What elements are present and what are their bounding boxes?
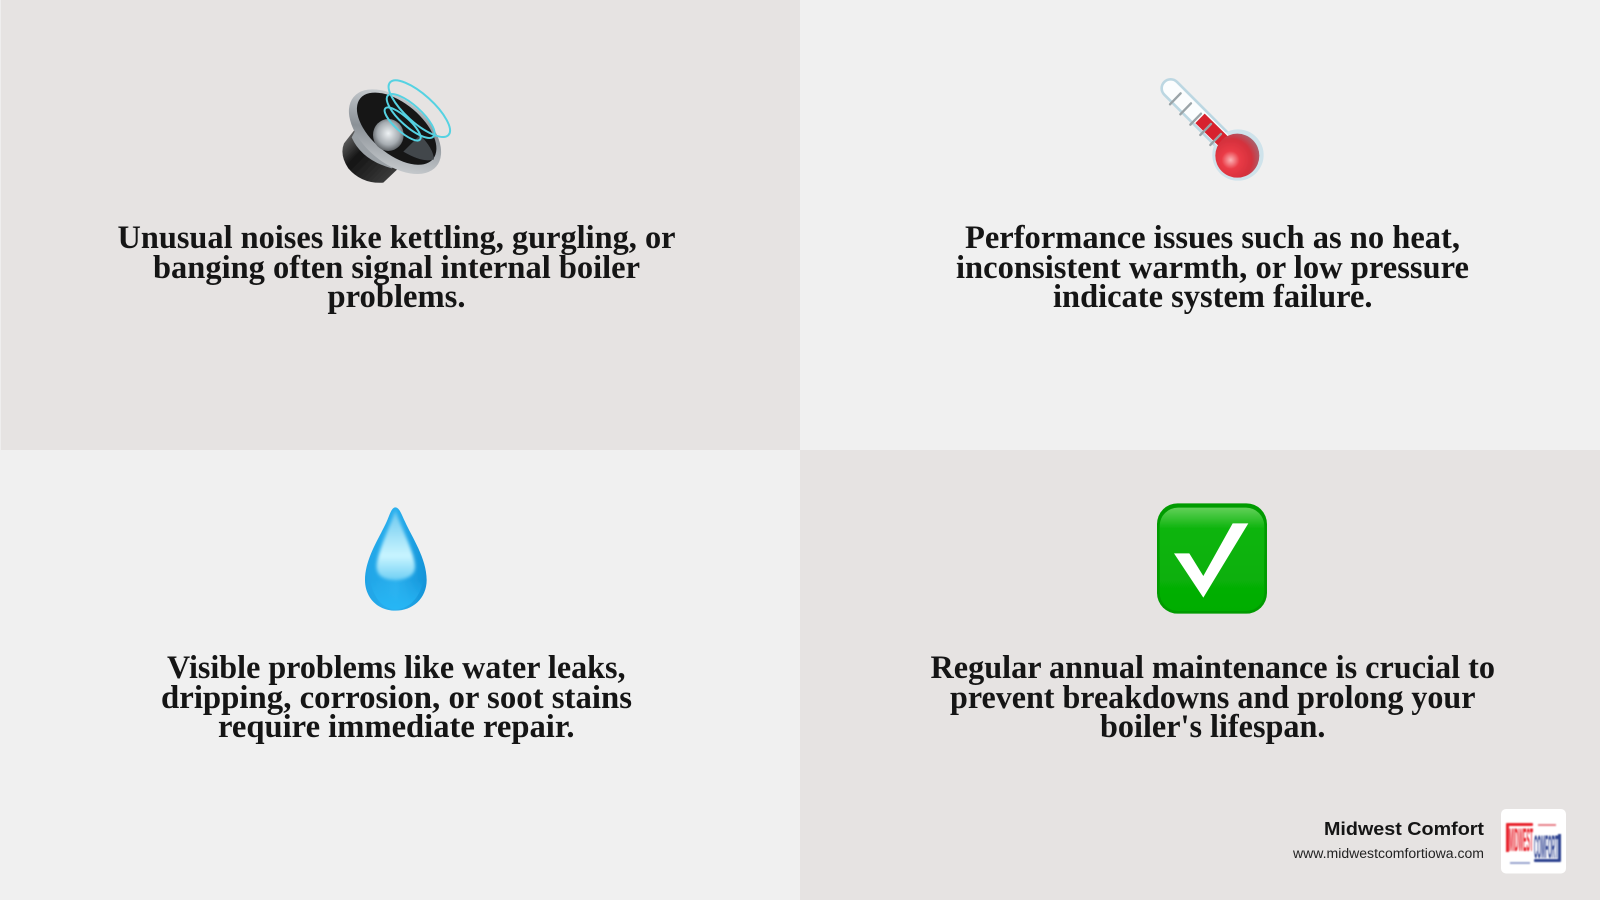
heading: unusual noises text: Unusual noises like kettling, gurgling, or xyxy=(118,220,676,256)
heading: annual maintenance text: prevent breakdowns and prolong your xyxy=(950,680,1476,716)
brand website: www.midwestcomfortiowa.com xyxy=(1292,846,1484,861)
heading: unusual noises text: banging often signal internal boiler xyxy=(153,250,640,286)
heading: unusual noises text xyxy=(118,220,676,315)
icon: water drop xyxy=(365,507,427,611)
panel: unusual noises xyxy=(0,0,800,450)
icon: thermometer xyxy=(1170,88,1264,181)
brand name: Midwest Comfort xyxy=(1324,819,1484,839)
brand footer xyxy=(1292,809,1566,874)
heading: performance issues text: indicate system failure. xyxy=(1053,279,1372,315)
heading: visible problems text: require immediate repair. xyxy=(218,709,574,745)
panel: performance issues xyxy=(800,0,1600,450)
heading: visible problems text: dripping, corrosion, or soot stains xyxy=(161,680,632,716)
heading: performance issues text: Performance issues such as no heat, xyxy=(965,220,1460,256)
heading: unusual noises text: problems. xyxy=(328,279,466,315)
heading: performance issues text xyxy=(956,220,1469,315)
heading: performance issues text: inconsistent warmth, or low pressure xyxy=(956,250,1469,286)
heading: annual maintenance text xyxy=(930,650,1495,745)
heading: visible problems text: Visible problems like water leaks, xyxy=(167,650,626,686)
panel: visible problems xyxy=(0,450,800,900)
logo xyxy=(1501,809,1566,874)
heading: annual maintenance text: boiler's lifespan. xyxy=(1100,709,1326,745)
heading: visible problems text xyxy=(161,650,632,745)
icon: green check mark xyxy=(1157,503,1267,614)
panel: annual maintenance xyxy=(800,450,1600,900)
heading: annual maintenance text: Regular annual maintenance is crucial to xyxy=(930,650,1495,686)
icon: speaker xyxy=(333,72,458,191)
